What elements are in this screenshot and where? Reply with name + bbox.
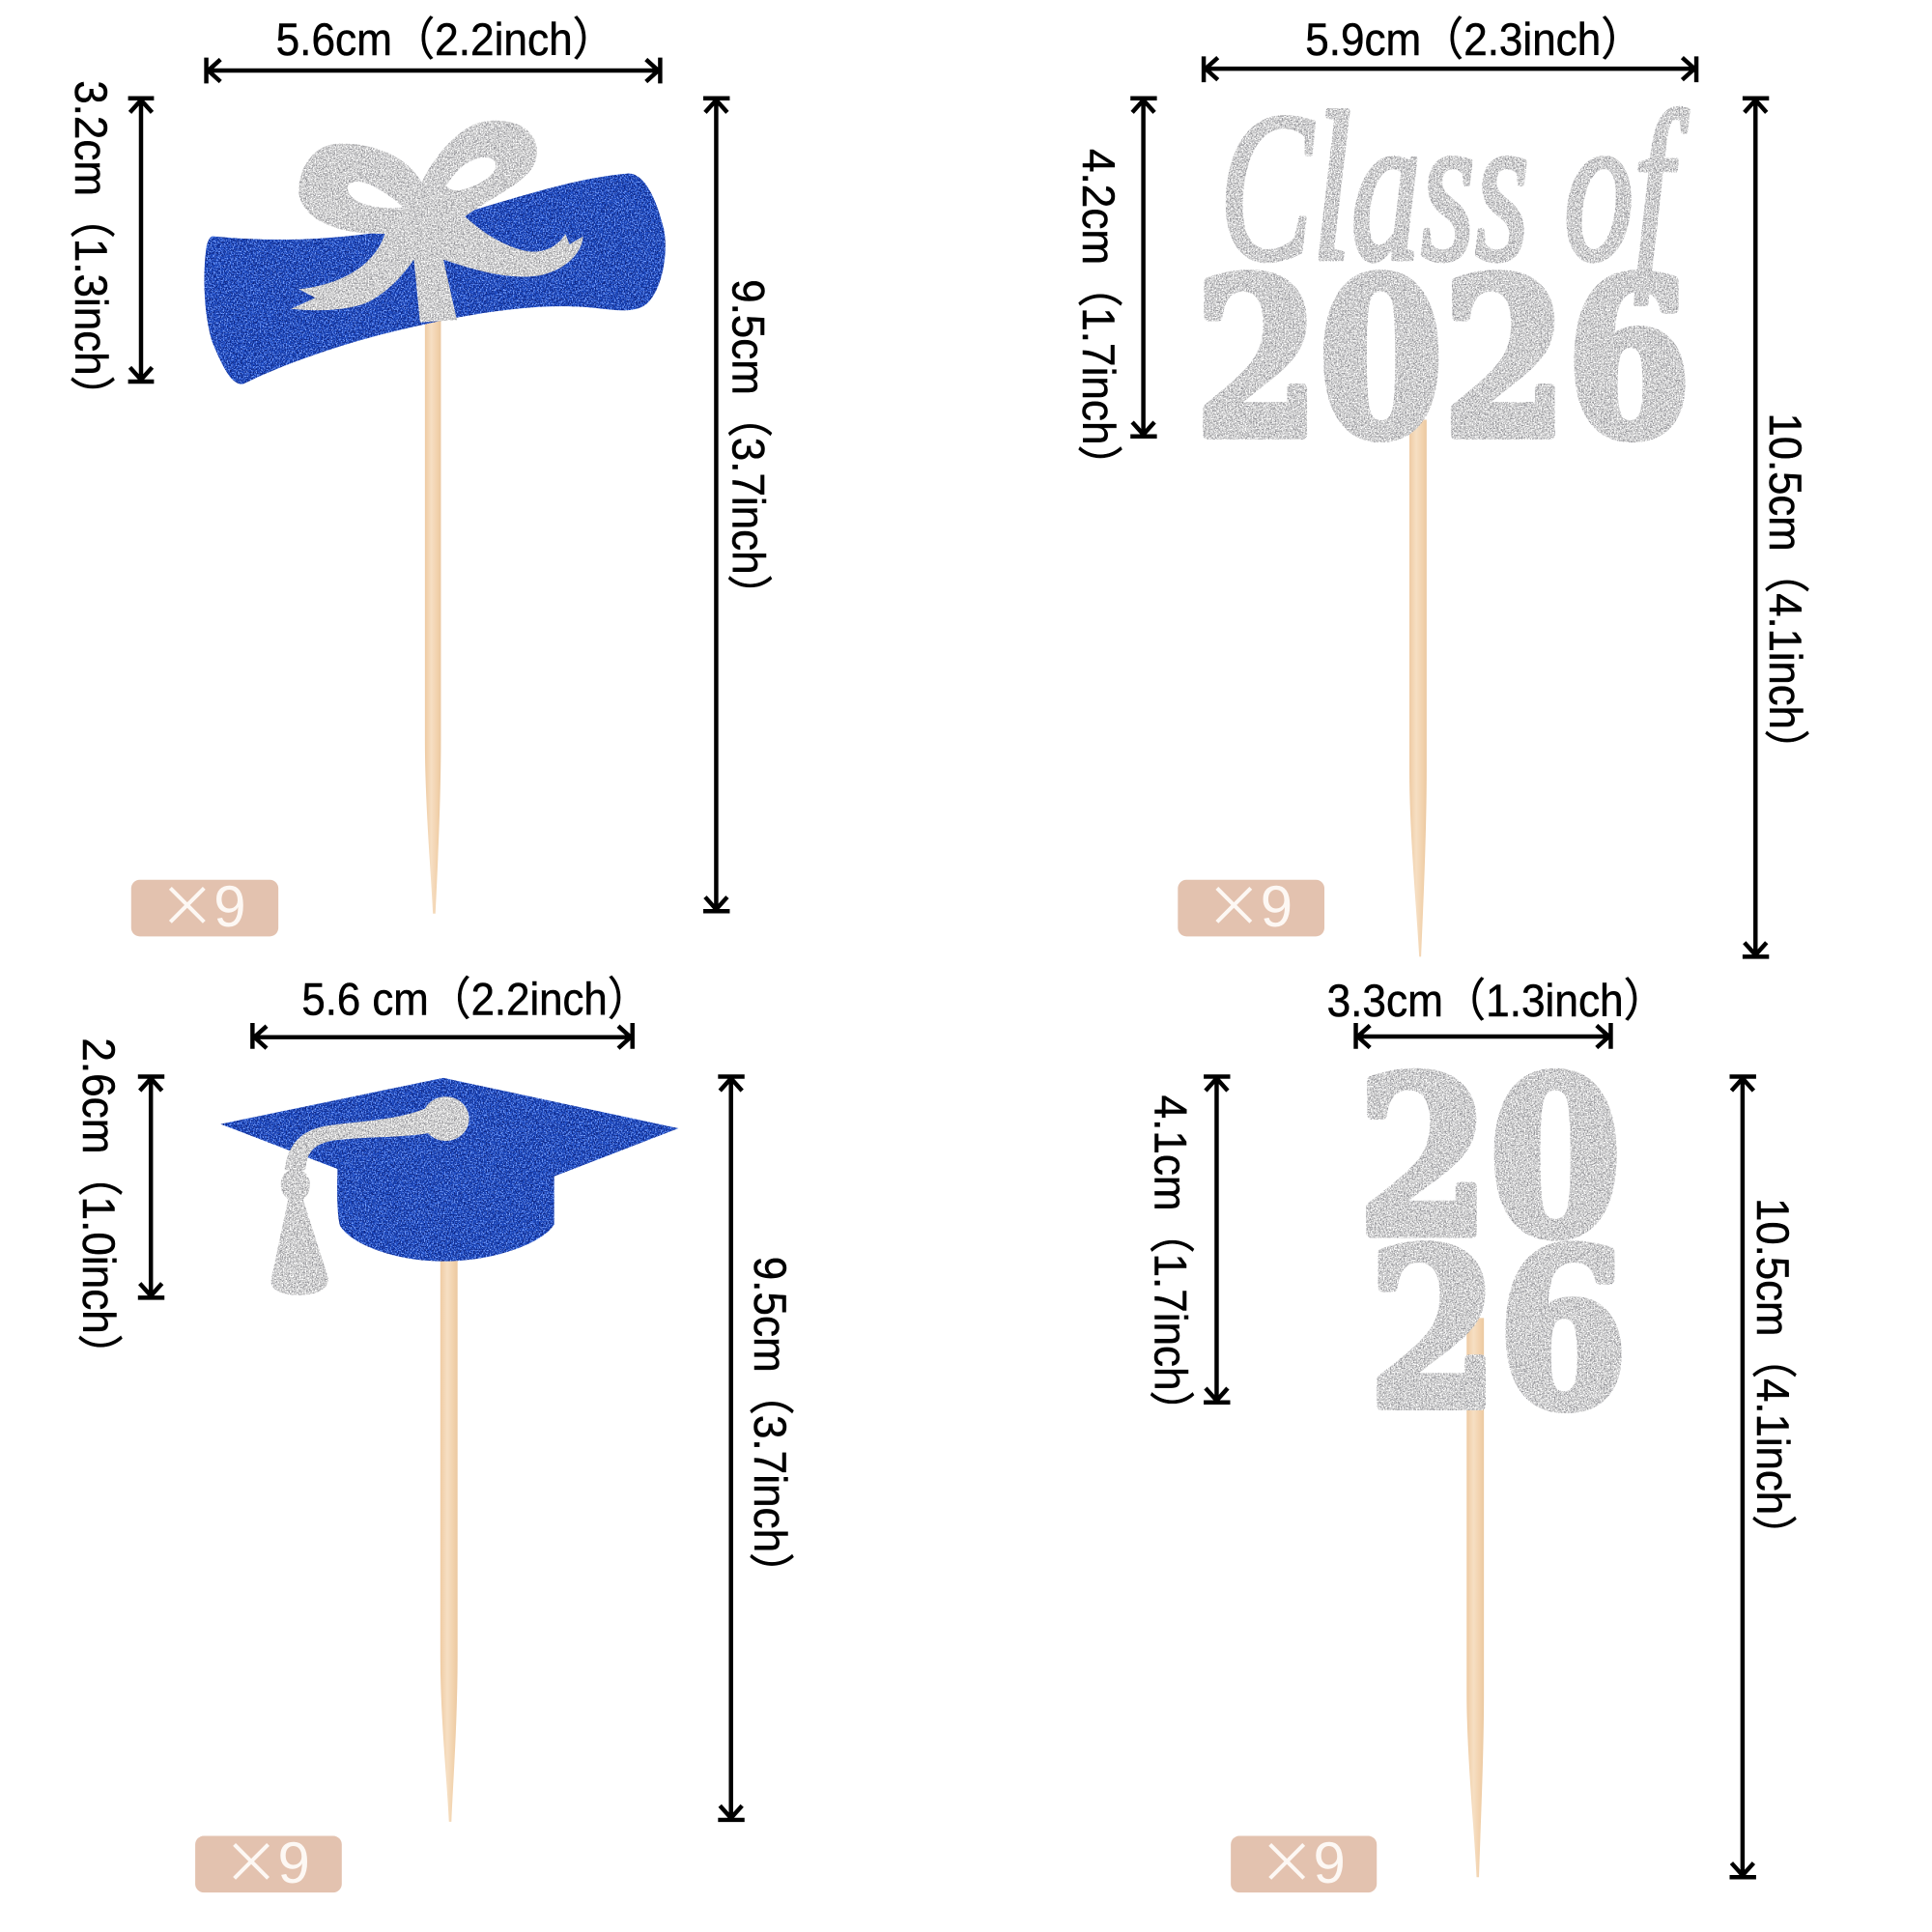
panel: 2026 stacked topper bbox=[1146, 975, 1799, 1899]
width arrow bbox=[1356, 1023, 1610, 1049]
icon: silver tassel bbox=[270, 1096, 469, 1295]
head height label: 2.6cm（1.0inch） bbox=[73, 1037, 125, 1377]
width arrow bbox=[207, 58, 660, 83]
quantity badge bbox=[1231, 1817, 1377, 1899]
head height arrow bbox=[138, 1076, 164, 1297]
width label: 5.6 cm（2.2inch） bbox=[301, 974, 650, 1025]
quantity badge: × bbox=[1206, 861, 1263, 943]
total height label: 10.5cm（4.1inch） bbox=[1747, 1198, 1799, 1557]
total height arrow bbox=[1729, 1076, 1756, 1877]
quantity badge bbox=[195, 1817, 342, 1899]
quantity badge: 9 bbox=[213, 874, 246, 939]
quantity badge bbox=[1178, 861, 1324, 943]
head height label: 3.2cm（1.3inch） bbox=[66, 80, 117, 418]
icon: blue diploma scroll bbox=[204, 174, 666, 384]
quantity badge: × bbox=[158, 861, 215, 943]
toothpick stick bbox=[425, 309, 440, 914]
width arrow bbox=[252, 1023, 633, 1049]
quantity badge: × bbox=[223, 1817, 279, 1899]
icon: silver ribbon bow bbox=[291, 121, 583, 323]
panel: diploma topper bbox=[66, 14, 775, 943]
width label: 5.9cm（2.3inch） bbox=[1305, 14, 1643, 65]
quantity badge bbox=[131, 861, 278, 943]
head height label: 4.2cm（1.7inch） bbox=[1073, 149, 1124, 488]
toothpick stick bbox=[1409, 420, 1427, 956]
quantity badge: 9 bbox=[278, 1831, 310, 1895]
toothpick stick bbox=[440, 1244, 458, 1822]
script lettering: Class of: Class of bbox=[1220, 69, 1689, 304]
quantity badge: 9 bbox=[1314, 1831, 1346, 1895]
panel: graduation cap topper bbox=[73, 974, 796, 1899]
total height arrow bbox=[718, 1076, 745, 1820]
head height arrow bbox=[1130, 99, 1157, 437]
total height label: 9.5cm（3.7inch） bbox=[745, 1257, 796, 1595]
icon: blue graduation cap bbox=[220, 1078, 679, 1262]
total height arrow bbox=[703, 99, 729, 911]
width label: 3.3cm（1.3inch） bbox=[1327, 975, 1666, 1026]
numerals: 26: 26 bbox=[1369, 1203, 1628, 1457]
numerals: 20: 20 bbox=[1357, 1030, 1621, 1284]
width label: 5.6cm（2.2inch） bbox=[276, 14, 615, 65]
quantity badge: × bbox=[1259, 1817, 1315, 1899]
numerals: 2026: 2026 bbox=[1195, 232, 1690, 486]
total height label: 9.5cm（3.7inch） bbox=[724, 279, 775, 617]
total height label: 10.5cm（4.1inch） bbox=[1760, 412, 1811, 772]
toothpick stick bbox=[1466, 1318, 1484, 1877]
head height arrow bbox=[128, 99, 154, 382]
quantity badge: 9 bbox=[1261, 874, 1293, 939]
total height arrow bbox=[1743, 99, 1769, 956]
head height label: 4.1cm（1.7inch） bbox=[1146, 1095, 1197, 1434]
width arrow bbox=[1204, 56, 1696, 82]
panel: Class of 2026 topper bbox=[1073, 14, 1811, 956]
head height arrow bbox=[1204, 1076, 1230, 1403]
